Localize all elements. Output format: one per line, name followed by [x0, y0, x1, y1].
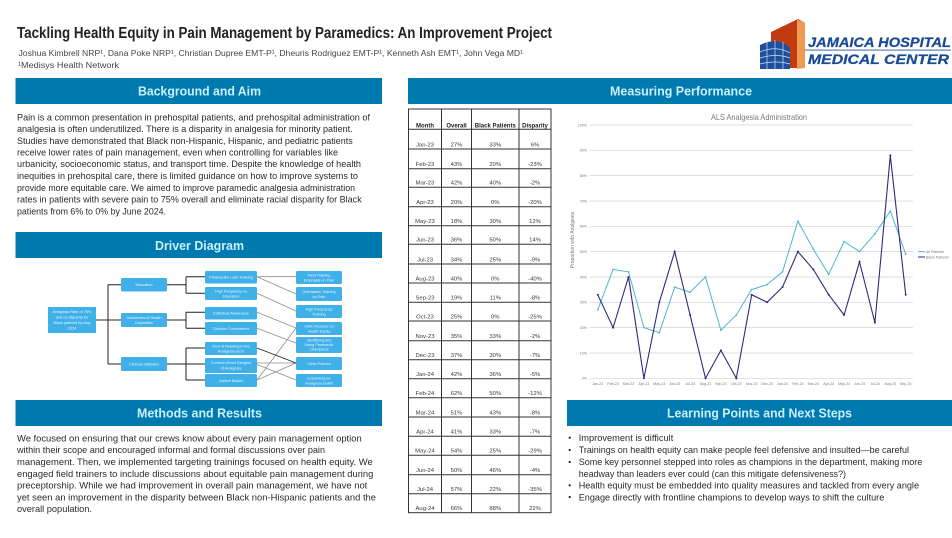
- x axis labels: Mar-24: [808, 382, 819, 386]
- table rows: Feb-24: [416, 391, 435, 397]
- change ideas: [296, 271, 342, 387]
- table rows: Jun-24: [416, 468, 435, 474]
- text block: methods and results: within their scope and encouraged informal and formal discussions over pain: [16, 444, 325, 455]
- table rows: Jun-23: [416, 238, 435, 244]
- table header: Month: [416, 124, 434, 130]
- table rows: 33%: [489, 430, 502, 436]
- text block: background: Studies have demonstrated that Black non-Hispanic, Hispanic, and pediatric patients: [17, 135, 353, 146]
- x axis labels: Aug-24: [885, 382, 896, 386]
- heading: Learning Points and Next Steps: Learning Points and Next Steps: [667, 406, 852, 420]
- secondary drivers: Analgesia Error: [218, 350, 245, 354]
- change ideas: on Pain: [313, 295, 325, 299]
- text block: methods and results: [16, 432, 376, 514]
- table rows: 40%: [489, 181, 502, 187]
- table rows: 62%: [451, 391, 463, 397]
- x axis labels: Oct-23: [731, 382, 742, 386]
- text block: background: receive lower rates of pain management, even when controlling for variables like: [17, 146, 338, 158]
- x axis labels: Jan-24: [777, 382, 788, 386]
- gridlines: [590, 125, 913, 378]
- y axis labels: 70%: [580, 199, 588, 203]
- table rows: 36%: [451, 238, 463, 244]
- heading: Methods and Results: Methods and Results: [137, 406, 262, 420]
- change ideas: Orientation Training: [302, 290, 336, 294]
- table rows: 40%: [451, 276, 463, 282]
- driver diagram: [48, 271, 342, 387]
- y axis labels: 90%: [580, 149, 588, 153]
- x axis labels: Dec-23: [761, 382, 773, 386]
- table rows: 43%: [489, 410, 502, 416]
- table rows: -2%: [530, 334, 541, 340]
- chart title: ALS Analgesia Administration: [711, 112, 807, 122]
- heading: Driver Diagram: Driver Diagram: [155, 238, 244, 253]
- text block: background: urbanicity, socioeconomic status, and transport time. Despite the knowledge of health: [17, 158, 361, 169]
- table rows: 30%: [489, 219, 502, 225]
- connectors: drivers to change ideas: [257, 277, 296, 380]
- text block: methods and results: We focused on ensuring that our crews know about every pain management option: [17, 432, 362, 444]
- table rows: 36%: [489, 372, 502, 378]
- table rows: Jul-24: [417, 487, 434, 493]
- table rows: 25%: [451, 314, 463, 320]
- table rows: May-23: [415, 219, 436, 225]
- change ideas: High Frequency: [306, 308, 332, 312]
- table rows: 33%: [489, 334, 502, 340]
- table rows: 33%: [489, 142, 502, 148]
- table rows: 19%: [451, 296, 463, 302]
- table rows: -2%: [530, 181, 541, 187]
- table rows: -20%: [528, 200, 543, 206]
- secondary drivers: Fear of Masking in the: [212, 344, 250, 348]
- y axis labels: 30%: [580, 301, 588, 305]
- x axis labels: Mar-23: [623, 382, 634, 386]
- table rows: 88%: [489, 506, 502, 512]
- table rows: 50%: [489, 391, 502, 397]
- table rows: Feb-23: [416, 162, 435, 168]
- change ideas: Health Equity: [308, 330, 330, 334]
- aim box: 2024: [68, 326, 76, 330]
- change ideas: Field Training: [308, 274, 330, 278]
- secondary drivers: Concern About Dangers: [211, 361, 251, 365]
- table rows: Aug-23: [416, 276, 435, 282]
- secondary drivers: Individual Awareness: [213, 312, 249, 316]
- table rows: 42%: [451, 372, 463, 378]
- primary drivers: [121, 278, 167, 371]
- aim box: and no disparity for: [56, 316, 89, 320]
- table rows: -8%: [530, 296, 541, 302]
- table rows: Sep-23: [416, 296, 435, 302]
- table rows: Oct-23: [416, 314, 435, 320]
- y axis labels: 50%: [580, 250, 588, 254]
- table rows: -5%: [530, 372, 541, 378]
- table rows: 43%: [451, 162, 463, 168]
- table rows: -9%: [530, 257, 541, 263]
- text block: background: rates in patients with severe pain to 75% overall and eliminate racial disparity for Black: [17, 194, 362, 204]
- bullet list: learning points: Some key personnel stepped into roles as champions in the department, making more: [579, 456, 922, 467]
- x axis labels: Sep-23: [715, 382, 727, 386]
- table rows: Apr-24: [416, 430, 435, 436]
- table rows: Mar-24: [416, 410, 435, 416]
- aim box: Black patients by May: [54, 321, 91, 325]
- x axis labels: Feb-24: [792, 382, 804, 386]
- heading: Measuring Performance: Measuring Performance: [610, 84, 752, 98]
- connectors: primary and secondary brackets: [96, 277, 205, 380]
- heading: Measuring Performance: [408, 78, 952, 104]
- text block: background: inequities in prehospital care, there is limited guidance on how to improve systems to: [17, 170, 358, 181]
- table rows: -23%: [528, 162, 543, 168]
- table rows: 35%: [451, 334, 463, 340]
- table rows: -35%: [528, 487, 543, 493]
- y axis title: Proportion with Analgesia: [570, 212, 576, 268]
- text block: methods and results: engaged field trainers to include discussions about equitable pain management during: [17, 468, 373, 479]
- text block: background: patients from 6% to 0% by June 2024.: [17, 205, 166, 216]
- table rows: 51%: [451, 410, 463, 416]
- table header: [416, 124, 548, 130]
- table rows: Dec-23: [416, 353, 435, 359]
- table rows: 0%: [491, 200, 500, 206]
- table rows: Jan-23: [416, 142, 435, 148]
- text block: methods and results: management. Then, we implemented targeting trainings focused on health equity. We: [17, 456, 373, 467]
- y axis labels: 60%: [580, 225, 588, 229]
- y axis labels: 20%: [580, 326, 588, 330]
- y axis labels: 80%: [580, 174, 588, 178]
- table rows: 20%: [489, 162, 502, 168]
- table rows: Jan-24: [416, 372, 435, 378]
- secondary drivers: Paramedics Lack Training: [209, 276, 253, 280]
- primary drivers: Awareness of Health: [127, 316, 161, 320]
- table rows: -7%: [530, 430, 541, 436]
- authors and affiliation: ¹Medisys Health Network: [18, 60, 120, 70]
- table rows: Aug-24: [416, 506, 435, 512]
- x axis labels: Sep-24: [900, 382, 911, 386]
- text block: methods and results: overall population.: [17, 503, 92, 514]
- x axis labels: May-24: [838, 382, 850, 386]
- table rows: -4%: [530, 468, 541, 474]
- y axis labels: 10%: [580, 351, 588, 355]
- aim box: [48, 307, 96, 333]
- change ideas: Using Paramedic: [305, 343, 334, 347]
- x axis labels: May-23: [653, 382, 665, 386]
- logo: Jamaica Hospital Medical Center: JAMAICA HOSPITAL: [808, 35, 951, 50]
- primary drivers: Clinician Attitudes: [129, 362, 159, 366]
- bullet list: learning points: Engage directly with frontline champions to develop ways to shift the culture: [579, 491, 884, 502]
- table rows: -40%: [528, 276, 543, 282]
- logo: Jamaica Hospital Medical Center: [760, 19, 951, 69]
- x axis labels: Apr-24: [823, 382, 834, 386]
- y axis labels: 100%: [578, 123, 588, 127]
- primary drivers: Disparities: [135, 321, 153, 325]
- bullet list: learning points: Health equity must be embedded into quality measures and tackled from every angle: [579, 480, 919, 491]
- table rows: 42%: [451, 181, 463, 187]
- secondary drivers: High Frequency vs: [215, 290, 247, 294]
- y axis labels: 40%: [580, 275, 588, 279]
- x axis labels: Jun-23: [669, 382, 680, 386]
- authors and affiliation: Joshua Kimbrell NRP¹, Dana Poke NRP¹, Christian Dupree EMT-P¹, Dheuris Rodriguez EMT-P¹, Kenneth Ash EMT¹, John Vega MD¹: [18, 48, 523, 58]
- table rows: 54%: [451, 449, 463, 455]
- change ideas: Training: [312, 312, 326, 316]
- heading: Background and Aim: [16, 78, 382, 104]
- series: black patients: [598, 155, 906, 378]
- x axis labels: Nov-23: [746, 382, 757, 386]
- text block: background: [17, 112, 370, 216]
- heading: Methods and Results: [16, 400, 382, 426]
- legend: [918, 250, 949, 259]
- heading: Learning Points and Next Steps: [567, 400, 952, 426]
- x axis labels: Jan-23: [592, 382, 603, 386]
- table rows: 27%: [451, 142, 463, 148]
- table rows: 0%: [491, 314, 500, 320]
- table rows: 0%: [491, 276, 500, 282]
- table rows: Nov-23: [416, 334, 435, 340]
- bullet list: learning points: Trainings on health equity can make people feel defensive and insulted—be careful: [579, 444, 909, 455]
- table header: Disparity: [522, 124, 548, 130]
- table rows: -7%: [530, 353, 541, 359]
- change ideas: Analgesia toolkit: [305, 382, 334, 386]
- bullet list: learning points: [569, 432, 922, 502]
- change ideas: Identifying and: [307, 338, 331, 342]
- x axis labels: Aug-23: [700, 382, 711, 386]
- change ideas: Emphasis on Pain: [304, 278, 334, 282]
- text block: methods and results: preceptorship. While we had improvement in overall pain management, we have not: [17, 480, 368, 491]
- series: all patients: [598, 211, 906, 333]
- x axis labels: Jun-24: [854, 382, 865, 386]
- heading: Driver Diagram: [16, 232, 382, 258]
- table rows: 50%: [451, 468, 463, 474]
- secondary drivers: [205, 271, 257, 387]
- aim box: Analgesia Rate of 75%: [53, 310, 92, 314]
- text block: methods and results: yet seen an improvement in the disparity between Black non-Hispanic patients and the: [17, 491, 376, 502]
- x axis labels: Jul-24: [870, 382, 880, 386]
- markers: all patients: [597, 210, 907, 334]
- table rows: -29%: [528, 449, 543, 455]
- table rows: Jul-23: [417, 257, 434, 263]
- text block: background: Pain is a common presentation in prehospital patients, and prehospital administration of: [17, 112, 370, 122]
- authors and affiliation: [18, 48, 523, 70]
- legend: All Patients: [926, 250, 944, 254]
- table rows: 12%: [529, 219, 542, 225]
- table rows: Mar-23: [416, 181, 435, 187]
- change ideas: Champions: [309, 348, 329, 352]
- x axis labels: [592, 382, 911, 386]
- heading: Background and Aim: Background and Aim: [138, 84, 261, 98]
- table rows: 11%: [490, 296, 502, 302]
- secondary drivers: Implicit Biases: [219, 379, 243, 383]
- table rows: 22%: [529, 506, 542, 512]
- table rows: May-24: [415, 449, 436, 455]
- table rows: -25%: [528, 314, 543, 320]
- table rows: 14%: [529, 238, 542, 244]
- secondary drivers: of Analgesia: [221, 366, 242, 370]
- table rows: 18%: [451, 219, 463, 225]
- table rows: -8%: [530, 410, 541, 416]
- y axis labels: [578, 123, 588, 381]
- table rows: 22%: [489, 487, 502, 493]
- secondary drivers: Education: [223, 294, 239, 298]
- table header: Black Patients: [475, 124, 516, 130]
- table rows: 41%: [451, 430, 463, 436]
- secondary drivers: Clinician Commitment: [213, 327, 250, 331]
- table rows: 20%: [451, 200, 463, 206]
- text block: background: provide more equitable care. We aimed to improve paramedic analgesia administration: [17, 182, 355, 193]
- x axis labels: Jul-23: [685, 382, 695, 386]
- bullet list: learning points: Improvement is difficult: [579, 432, 674, 443]
- table rows: 34%: [451, 257, 463, 263]
- table rows: 6%: [531, 142, 540, 148]
- table rows: 66%: [451, 506, 463, 512]
- markers: black patients: [597, 154, 907, 379]
- change ideas: Clear Policies: [307, 362, 331, 366]
- logo: Jamaica Hospital Medical Center: MEDICAL CENTER: [808, 52, 949, 67]
- table rows: Apr-23: [416, 200, 435, 206]
- title: Tackling Health Equity in Pain Management by Paramedics: An Improvement Project: [17, 25, 552, 42]
- table rows: 37%: [451, 353, 463, 359]
- x axis labels: Feb-23: [607, 382, 619, 386]
- data table: [408, 109, 551, 513]
- change ideas: CME Focused on: [304, 324, 334, 328]
- y axis labels: 0%: [582, 377, 588, 381]
- legend: Black Patients: [926, 255, 949, 259]
- text block: background: analgesia is often underutilized. There is a disparity in analgesia for minority patient.: [17, 123, 353, 134]
- line chart: ALS analgesia administration: [570, 112, 949, 386]
- table rows: 57%: [451, 487, 463, 493]
- table rows: 46%: [489, 468, 502, 474]
- table rows: -12%: [528, 391, 543, 397]
- bullet list: learning points: headway than leaders ever could (can this mitigate defensiveness?): [579, 468, 846, 479]
- table rows: [415, 142, 543, 512]
- table header: Overall: [446, 124, 467, 130]
- primary drivers: Education: [136, 283, 152, 287]
- table grid: [408, 109, 551, 513]
- table rows: 25%: [489, 449, 502, 455]
- x axis labels: Apr-23: [639, 382, 649, 386]
- table rows: 25%: [489, 257, 502, 263]
- change ideas: Expanding an: [307, 376, 331, 380]
- table rows: 30%: [489, 353, 502, 359]
- table rows: 50%: [489, 238, 502, 244]
